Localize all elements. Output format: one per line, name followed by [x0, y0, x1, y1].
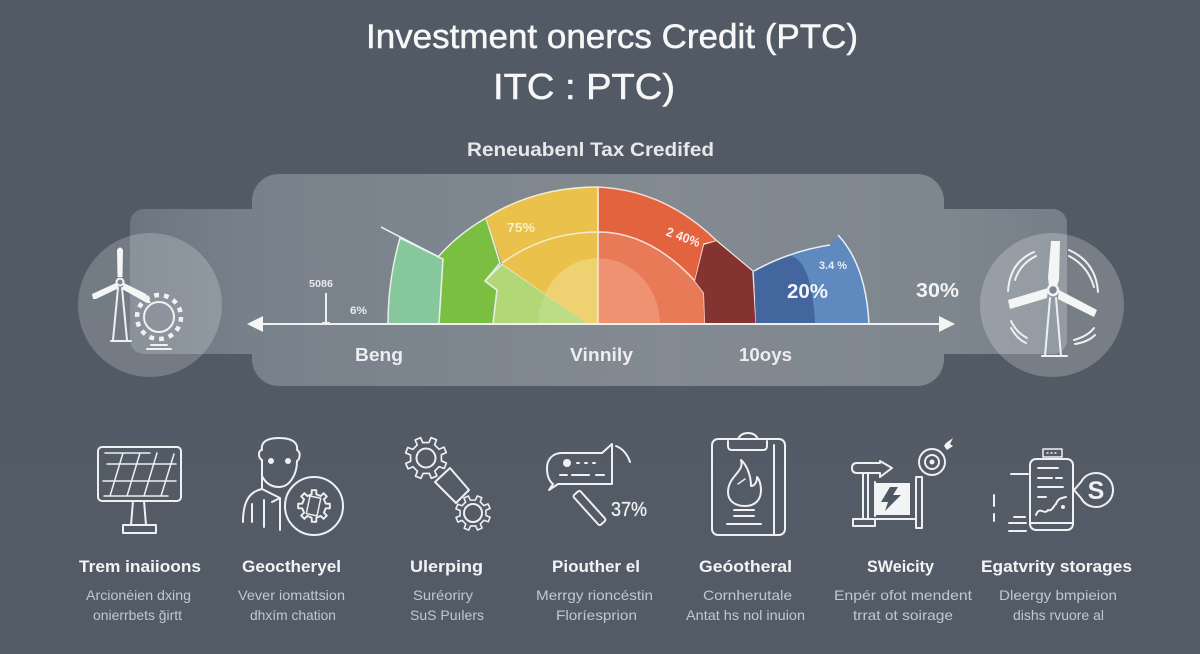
column 1 text: Arcionėien dxing	[86, 587, 191, 603]
title line 1: Investment onercs Credit (PTC)	[366, 18, 858, 56]
axis category labels: 10oys	[739, 345, 792, 365]
chart value labels	[350, 220, 959, 317]
segment: light green	[484, 263, 586, 323]
segment: dark red	[695, 241, 756, 324]
arrow: horizontal timeline axis	[247, 316, 955, 332]
column 7 text: Egatvrity storages	[981, 558, 1132, 576]
icon: battery with dollar badge: S	[1088, 477, 1104, 505]
icon: wind turbine and sun badge	[78, 233, 222, 377]
column 5 text: Geóotheral	[699, 558, 792, 576]
column 4 text	[536, 558, 653, 623]
panel: wide backing band	[130, 209, 1067, 354]
icon: solar panel	[98, 447, 181, 533]
column 4 text: Piouther el	[552, 558, 640, 576]
column 2 text: Geoctheryel	[242, 558, 341, 576]
title line 2: ITC : PTC)	[493, 66, 675, 107]
column 6 text: SWeicity	[867, 558, 935, 576]
icon: person with gear badge	[243, 438, 343, 535]
column 3 text: Ulerping	[410, 558, 483, 576]
segment: orange	[597, 231, 705, 323]
segment: red	[598, 187, 717, 281]
axis category labels: Beng	[355, 345, 403, 365]
segment: teal	[388, 238, 443, 324]
icon: speech bubble with 37%: 37%	[611, 499, 647, 521]
column 7 text: dishs rvuore al	[1013, 607, 1104, 623]
chart value labels: 6%	[350, 305, 367, 317]
segment: green	[438, 218, 500, 324]
column 4 text: Floríesprion	[556, 607, 637, 623]
segment: blue	[754, 235, 869, 324]
chart: layered radial credit gauge	[380, 186, 870, 323]
segment: yellow	[486, 186, 598, 323]
column 6 text: trrat ot soirage	[853, 607, 953, 623]
column 5 text: Cornherutale	[703, 587, 792, 603]
chart value labels: 30%	[916, 280, 959, 302]
icon: speech bubble with 37%	[547, 444, 647, 526]
column 1 text	[79, 558, 201, 623]
marker: tick with value: 5086	[309, 279, 333, 290]
column 3 text: Suréoriry	[413, 587, 473, 603]
column 3 text: SuS Puılers	[410, 607, 484, 623]
column 6 text: Enpér ofot mendent	[834, 587, 972, 603]
icon: linked gears	[399, 431, 496, 536]
chart value labels: 2 40%	[664, 224, 703, 250]
column 6 text	[834, 558, 972, 623]
icon: battery with dollar badge	[994, 449, 1113, 531]
column 2 text	[238, 558, 345, 623]
column 1 text: onierrbets ğirtt	[93, 607, 182, 623]
icon: switch box with target	[852, 438, 953, 528]
column 2 text: Vever iomattsion	[238, 587, 345, 603]
axis category labels	[355, 345, 792, 365]
column 1 text: Trem inaiioons	[79, 558, 201, 576]
chart value labels: 3.4 %	[819, 260, 847, 272]
subtitle: Reneuabenl Tax Credifed	[467, 140, 714, 161]
column 5 text: Antat hs nol inuion	[686, 607, 805, 623]
panel: central chart panel	[252, 174, 944, 386]
chart value labels: 20%	[787, 281, 828, 303]
column 3 text	[410, 558, 484, 623]
column 7 text: Dleergy bmpieion	[999, 587, 1117, 603]
icon: large wind turbine	[980, 233, 1124, 377]
marker: tick with value	[309, 279, 333, 323]
column 7 text	[981, 558, 1132, 623]
icon: clipboard with flame	[712, 433, 785, 535]
column 5 text	[686, 558, 805, 623]
column 4 text: Merrgy rioncéstin	[536, 587, 653, 603]
chart value labels: 75%	[507, 220, 535, 235]
column 2 text: dhxím chation	[250, 607, 336, 623]
axis category labels: Vinnily	[570, 345, 633, 365]
